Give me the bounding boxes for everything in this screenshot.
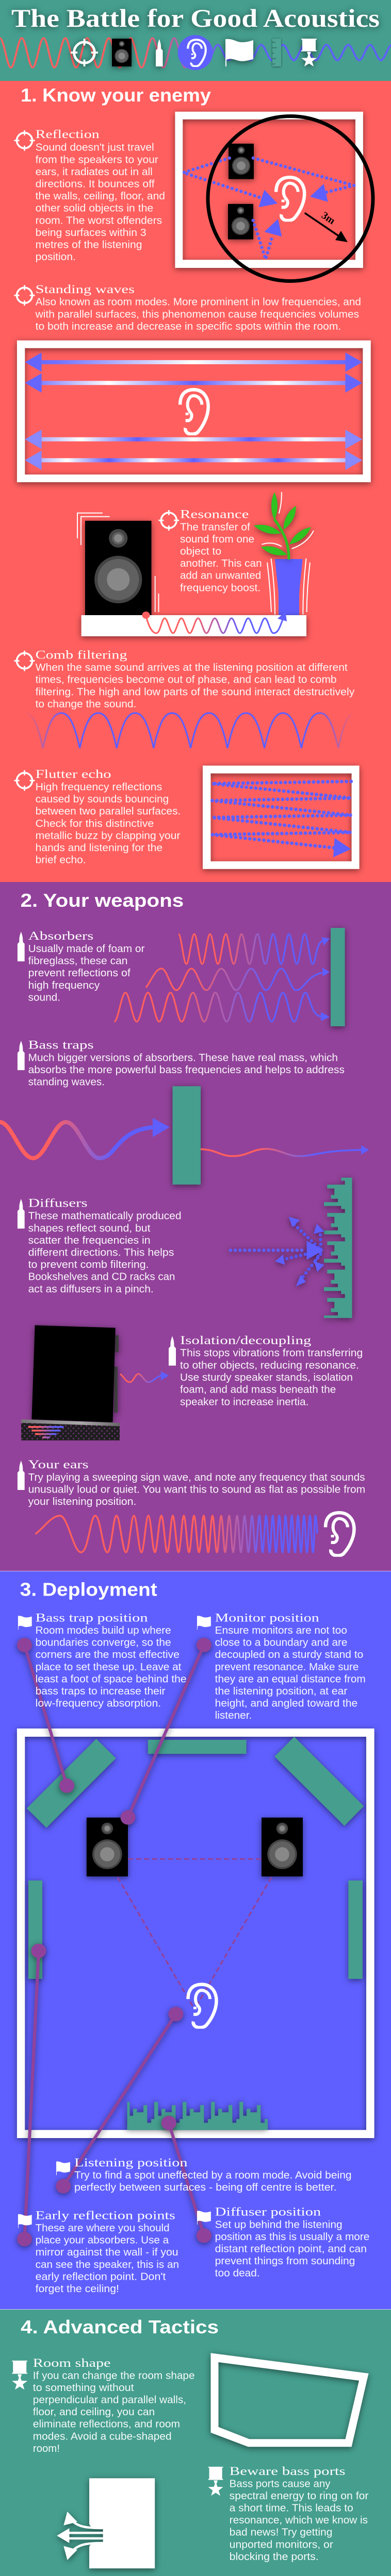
text block [36,662,354,710]
text block: boundaries converge, so the [36,1637,171,1649]
reflection paths [183,158,354,259]
scatter arrows [231,1217,324,1286]
text block: unported monitors, or [230,2539,333,2550]
panel: room shape [12,2353,368,2454]
text block: mirror against the wall - if you [36,2247,178,2258]
text block: high frequency [28,980,100,991]
ported speaker [57,2478,155,2568]
text block: This stops vibrations from transferring [180,1348,363,1359]
text block: close to a boundary and are [215,1637,347,1649]
text block: listener. [215,1710,252,1721]
text block: eliminate reflections, and room [33,2419,180,2430]
text block: forget the ceiling! [36,2283,119,2295]
panel: reflection [14,112,373,281]
arrow: second mode [25,373,362,393]
callout lines [17,1638,211,2246]
text block: Usually made of foam or [28,943,145,955]
arrow: first mode [25,352,362,372]
icon: diffuser [272,39,281,66]
heading: Comb filtering [36,649,127,662]
rear diffuser [127,2102,268,2130]
icon: medal [301,39,317,66]
text block [36,1625,187,1709]
heading: Diffuser position [215,2206,321,2218]
text block: to other objects, reducing resonance. [180,1360,359,1371]
text block: blocking the ports. [230,2551,319,2563]
diagram: deployment room [17,1728,374,2138]
text block [36,2223,179,2295]
ear [180,389,208,434]
wave: lower frequency [114,993,330,1022]
wave: incoming bass [0,1118,170,1158]
small vibration wave [120,1371,169,1382]
speaker [229,144,254,179]
text block: prevent resonance. Make sure [215,1662,359,1673]
text block: Check for this distinctive [36,818,154,829]
text block: add an unwanted [180,570,261,582]
sweep wave [36,1516,317,1552]
text block: modes. Avoid a cube-shaped [33,2431,172,2442]
text block [180,1348,363,1408]
text block: object to [180,546,221,557]
diagram: reflection room [175,112,373,281]
icon: speaker [112,39,132,66]
text block: room. The worst offenders [36,215,162,226]
text block: a short time. This leads to [230,2503,353,2514]
isolation foam [21,1423,120,1440]
icon: target [14,651,35,671]
header sine wave [0,38,391,67]
text block: Set up behind the listening [215,2219,343,2230]
text block: position. [36,251,76,263]
icon: flag [18,2214,32,2228]
isolation plate [21,1419,120,1426]
icon: flag [197,1616,211,1630]
heading: Flutter echo [36,768,111,781]
wave: high frequency [178,934,330,964]
text block: directions. It bounces off [36,178,155,190]
text block: Also known as room modes. More prominent in low frequencies, and [36,297,361,308]
text block: prevent reflections of [28,968,131,979]
icon: bullet [18,931,25,961]
text block [215,1625,366,1721]
text block: early reflection point. Don't [36,2271,166,2282]
text block: can see the speaker, this is an [36,2259,179,2270]
icon: bullet [18,1461,25,1490]
section heading: know your enemy: 1. Know your enemy [21,84,211,106]
text block: sound. [28,992,60,1004]
3m arrow [305,210,348,242]
text block: Ensure monitors are not too [215,1625,347,1636]
right monitor [262,1818,303,1876]
icon: flag [18,1616,32,1630]
heading: Bass trap position [36,1611,148,1624]
text block: scatter the frequencies in [28,1235,150,1246]
text block: metallic buzz by clapping your [36,830,181,841]
text block: metres of the listening [36,239,142,250]
text block: Sound doesn't just travel [36,142,154,154]
text block [35,297,361,332]
diffuser panel [324,1178,352,1318]
text block: The transfer of [180,521,250,533]
icon: bullet [18,1041,25,1070]
text block: another. This can [180,558,262,569]
panel: bass traps [0,1039,369,1184]
text block: being surfaces within 3 [36,227,146,239]
heading: Absorbers [28,929,93,942]
section heading: your weapons: 2. Your weapons [21,890,184,911]
vase [275,559,302,615]
speaker [85,521,152,615]
left corner bass trap [27,1739,116,1828]
panel: isolation / decoupling [21,1325,363,1440]
text block [74,2170,352,2193]
panel: your ears [18,1458,365,1556]
port air arrows [68,2521,103,2551]
heading: Reflection [36,128,100,141]
text block: height, and angled toward the [215,1698,357,1709]
panel: beware bass ports [57,2465,369,2568]
section heading: deployment: 3. Deployment [20,1579,157,1600]
text block: decoupled on a sturdy stand to [215,1649,363,1660]
text block: position as this is usually a more [215,2231,369,2243]
text block [28,1472,365,1507]
text block: speaker to increase inertia. [180,1396,308,1408]
text block [180,521,262,594]
left side absorber [28,1880,42,1979]
speaker on isolation pad [21,1325,120,1440]
text block: Use sturdy speaker stands, isolation [180,1372,353,1383]
text block: fibreglass, these can [28,956,127,967]
text block: distant reflection point, and can [215,2243,367,2255]
speaker [228,204,253,240]
text block: from the speakers to your [36,154,158,165]
icon: target [14,130,35,151]
text block: Try to find a spot uneffected by a room mode. Avoid being [74,2170,352,2181]
heading: Your ears [28,1458,89,1471]
text block: perfectly between surfaces - being off centre is better. [74,2182,337,2193]
text block [36,142,165,263]
text block [230,2478,369,2563]
section heading: advanced tactics: 4. Advanced Tactics [21,2316,219,2337]
text block: times, frequencies become out of phase, and can lead to comb [36,674,337,686]
text block: with parallel surfaces, this phenomenon cause frequencies volumes [35,309,359,320]
text block: corners are the most effective [36,1649,180,1660]
text block [215,2219,369,2279]
text block: perpendicular and parallel walls, [33,2395,186,2406]
text block: your listening position. [28,1496,136,1507]
text block: Bookshelves and CD racks can [28,1272,175,1283]
panel: monitor position [197,1611,366,1721]
plant [254,492,311,560]
bouncing dots [212,782,351,848]
3 metre radius circle [208,116,373,281]
text block: These mathematically produced [28,1211,181,1222]
comb wave [25,713,355,748]
text block: When the same sound arrives at the listening position at different [36,662,348,673]
icon: flag [197,2211,211,2225]
text block [28,1052,345,1088]
panel: resonance [77,492,314,636]
foam logo bars [28,1426,63,1438]
panel: early reflection points [18,2209,179,2295]
text block: Bass ports cause any [230,2478,330,2489]
icon: flag [225,39,253,66]
text block: frequency boost. [180,582,260,594]
text block: caused by sounds bouncing [36,794,169,805]
vibration lines [77,492,314,615]
panel: standing waves [14,283,371,482]
shelf [82,615,306,636]
diagram: flutter echo room [203,766,360,869]
text block: bass traps to increase their [36,1686,166,1697]
text block: to prevent comb filtering. [28,1259,149,1270]
icon: medal [12,2361,27,2389]
arrow head [333,838,351,857]
text block: prevent things from sounding [215,2256,355,2267]
text block: Try playing a sweeping sign wave, and note any frequency that sounds [28,1472,365,1483]
heading: Bass traps [28,1039,94,1052]
text block: ears, it radiates out in all [36,166,153,178]
icon: flag [56,2161,70,2175]
3m arrow: 3m [319,210,337,227]
icon: bullet [18,1199,25,1229]
text block [36,782,181,866]
icon: ear in circle [178,35,213,70]
text block: low-frequency absorption. [36,1698,161,1709]
icon: target [71,39,98,66]
text block: shapes reflect sound, but [28,1223,151,1234]
left monitor [87,1818,128,1876]
text block: the walls, ceiling, floor, and [36,191,165,202]
irregular room outline [210,2353,368,2447]
text block: different directions. This helps [28,1247,174,1258]
text block: place to set these up. Leave at [36,1662,182,1673]
absorber panel [331,928,345,1026]
text block: foam, and add mass beneath the [180,1384,336,1396]
text block: spectral energy to ring on for [230,2490,369,2502]
diagram: standing waves room [17,341,371,482]
arrow: third mode [25,430,362,449]
text block: These are where you should [36,2223,170,2234]
text block: the listening position, at ear [215,1686,348,1697]
text block: least a foot of space behind the [36,1673,187,1685]
wave: mid frequency [146,968,330,990]
text block: room! [33,2443,60,2454]
icon: target [14,770,35,791]
heading: Diffusers [28,1196,88,1209]
text block [33,2370,195,2454]
top absorber [148,1740,247,1754]
text block: hands and listening for the [36,842,162,854]
text block: absorbs the more powerful bass frequencies and helps to address [28,1064,345,1076]
heading: Early reflection points [36,2209,175,2222]
text block: to change the sound. [36,699,136,710]
panel: diffuser position [197,2206,369,2279]
text block: Room modes build up where [36,1625,171,1636]
right corner bass trap [274,1737,364,1826]
header panel [0,4,391,70]
icon: target [14,285,35,306]
text block: resonance, which we know is [230,2515,368,2526]
text block: brief echo. [36,855,86,866]
panel: bass trap position [18,1611,187,1709]
text block: filtering. The high and low parts of the sound interact destructively [36,686,354,698]
icon: bullet [156,39,163,66]
text block: If you can change the room shape [33,2370,195,2381]
text block: bad news! Try getting [230,2527,332,2538]
wave: reduced bass [201,1145,369,1156]
text block: floor, and ceiling, you can [33,2406,155,2418]
heading: Resonance [180,508,249,521]
arrow: fourth mode [25,450,362,470]
text block: sound from one [180,534,254,545]
ear [325,1513,354,1556]
vibration wave [142,612,287,633]
text block: Much bigger versions of absorbers. These have real mass, which [28,1052,338,1063]
room frame [17,1728,374,2138]
icon: medal [208,2467,223,2496]
text block: they are an equal distance from [215,1673,366,1685]
text block: between two parallel surfaces. [36,806,181,817]
title: The Battle for Good Acoustics [11,4,380,32]
text block: standing waves. [28,1077,105,1088]
heading: Listening position [74,2156,188,2169]
heading: Standing waves [36,283,135,296]
panel: diffusers [18,1178,352,1318]
text block [28,1211,181,1295]
text block: to something without [33,2382,134,2394]
panel: flutter echo [14,766,360,869]
right side absorber [348,1880,363,1979]
panel: listening position [56,2156,352,2193]
heading: Beware bass ports [230,2465,346,2478]
panel: absorbers [18,928,345,1026]
bass trap panel [172,1086,201,1184]
text block: unusually loud or quiet. You want this to sound as flat as possible from [28,1484,365,1495]
text block [28,943,145,1004]
text block: too dead. [215,2268,260,2279]
text block: place your absorbers. Use a [36,2235,169,2246]
text block: to both increase and decrease in specific spots within the room. [36,321,341,332]
heading: Isolation/decoupling [180,1334,312,1347]
text block: act as diffusers in a pinch. [28,1283,154,1295]
text block: other solid objects in the [36,203,153,214]
icon: target [158,510,179,531]
text block: High frequency reflections [36,782,162,793]
ear [188,1985,217,2028]
heading: Monitor position [215,1611,319,1624]
heading: Room shape [33,2357,111,2369]
panel: comb filtering [14,649,355,748]
ear [276,177,304,221]
listening triangle [118,1859,271,2009]
icon: bullet [169,1336,176,1366]
